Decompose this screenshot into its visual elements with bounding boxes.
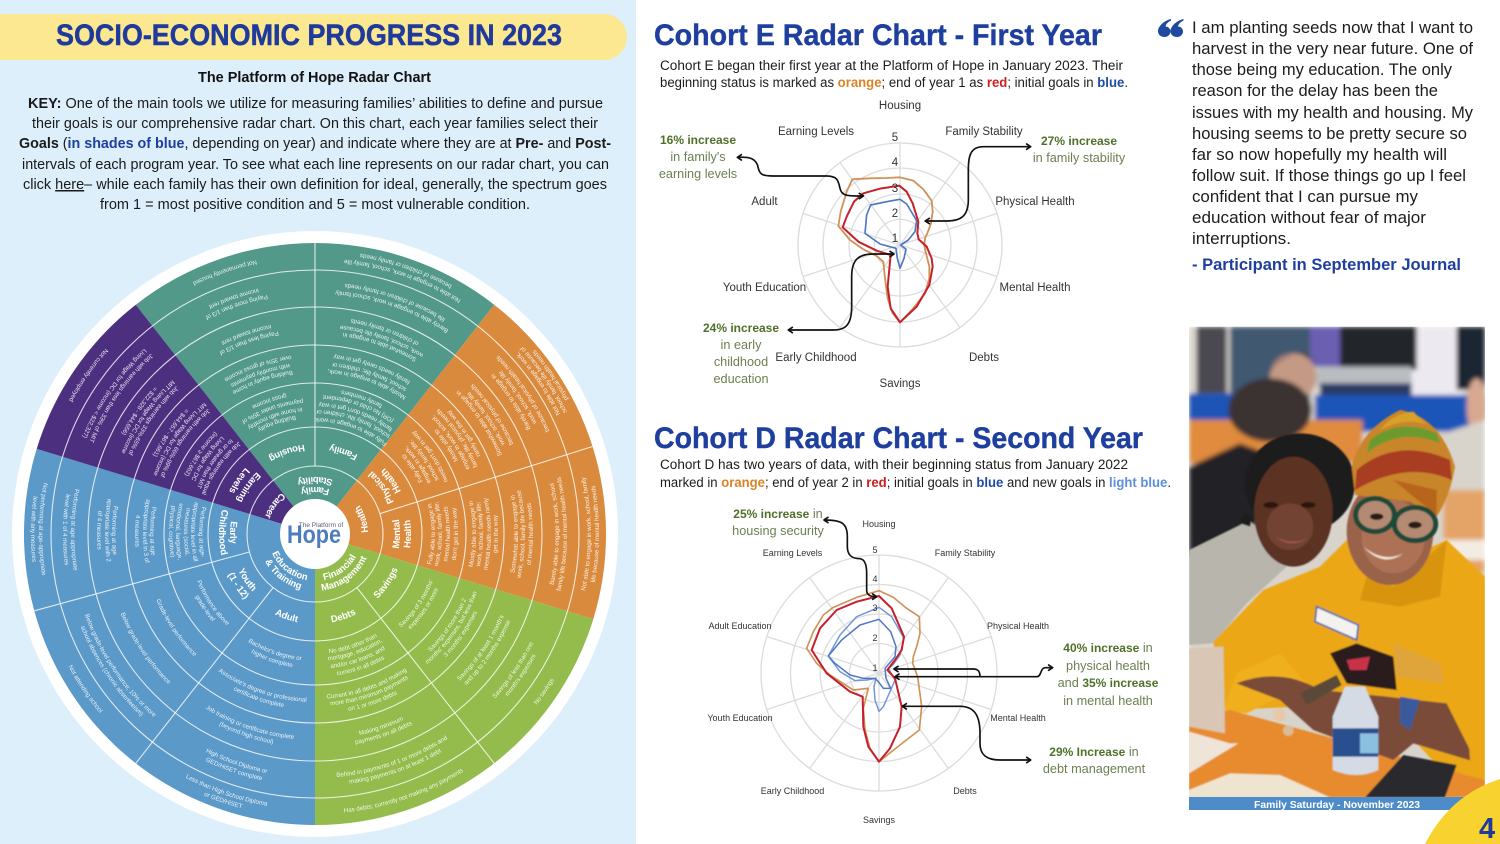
level text: youth: school absences (chronic absenteeism)	[74, 624, 145, 721]
level text: early childhood: appropriate level with 2	[102, 498, 113, 563]
level text: mental health: of mental health needs	[526, 502, 535, 566]
level text: housing: gross income	[252, 392, 286, 408]
domain labels: Financial	[322, 554, 356, 580]
axis labels	[723, 100, 1075, 390]
level text: savings: 3 months' expenses	[442, 609, 481, 660]
callout: 27% increase: 27% increase	[1041, 134, 1117, 148]
text block: key explanation: Goals (in shades of blue, depending on year) and indicate where they are at Pre- and Post-	[19, 135, 611, 152]
text block: Cohort D description: Cohort D has two years of data, with their beginning status from January 2022	[660, 457, 1128, 472]
level text: debts: No debt other than	[327, 632, 380, 658]
text block: participant quote: far so now hopefully my health will	[1192, 145, 1447, 164]
domain labels: Housing	[268, 444, 305, 461]
heading: Cohort E: Cohort E Radar Chart - First Year	[654, 19, 1102, 52]
level text: mental health: Mostly able to engage in	[467, 500, 478, 568]
callout: 25% increase: housing security	[732, 524, 824, 538]
wedge: financial management	[315, 534, 593, 825]
level text: early childhood	[30, 483, 206, 576]
axis labels: Debts	[969, 352, 999, 364]
axis labels: Youth Education	[723, 282, 806, 294]
text block: key explanation	[19, 95, 611, 213]
domain labels: Health	[404, 520, 412, 548]
text block: participant quote: confident that I can pursue my	[1192, 187, 1418, 206]
text block: key explanation: from 1 = most positive condition and 5 = most vulnerable condition.	[100, 196, 530, 213]
level text: savings: month's expenses	[503, 653, 539, 699]
level text: early childhood: Performing at age-	[197, 506, 207, 558]
wedge: family stability	[136, 243, 494, 534]
level text: mental health: work, school, family life;	[433, 501, 444, 568]
level text: debts: Making minimum	[358, 715, 405, 738]
axis labels: Earning Levels	[763, 548, 823, 558]
level text: adult: Job training or certificate complete	[203, 704, 296, 746]
domain labels: Family	[302, 486, 330, 496]
level text: youth: grade-level	[193, 593, 217, 623]
level text: physical health	[402, 346, 570, 483]
level text: physical health: engage in work,	[402, 443, 434, 485]
domain labels: Childhood	[219, 510, 228, 555]
logo: The Platform of Hope: Hope	[287, 521, 341, 549]
level text: mental health: family life because of mental health needs	[556, 476, 569, 592]
axis labels: Housing	[879, 100, 921, 112]
level text: adult: or GED/HiSET	[203, 791, 244, 811]
callout: 40% and 35% increase: in mental health	[1063, 694, 1153, 708]
chart: Cohort D radar	[707, 517, 1053, 825]
level text: earning levels: Job with earnings less than 33% of MIT	[82, 349, 155, 445]
level text: family	[314, 254, 460, 446]
axis labels: Adult Education	[708, 621, 772, 631]
level text: earning levels: = $44,657 - $67,661)	[149, 406, 190, 459]
chart: Cohort E radar	[723, 100, 1075, 390]
logo: The Platform of Hope: The Platform of	[299, 522, 343, 529]
level text: mental health: work, school, family life because	[515, 489, 527, 580]
domain labels: Management	[321, 556, 367, 591]
level text: family: family needs don't get in way	[318, 402, 392, 432]
level text: housing: Not permanently housed	[193, 260, 257, 286]
level text: physical health: school, family life;	[407, 437, 442, 483]
callout: 40% and 35% increase: and 35% increase	[1058, 676, 1158, 690]
level text: family: family needs rarely get in way	[331, 348, 413, 386]
text block: Cohort E description	[660, 58, 1128, 90]
text block: key explanation: KEY: One of the main tools we utilize for measuring families’ abilities to define and pursue	[28, 95, 603, 112]
level text: physical health: rarely get in the way	[445, 407, 484, 459]
level text: earning levels: Living Wage for DC (income < $22,327)	[76, 344, 149, 440]
level text: earning levels: Job with earnings 66%-99% of	[154, 404, 212, 480]
text block: participant quote: follow suit. If those things go up I feel	[1192, 166, 1466, 185]
level text: family: life because of children or family needs	[343, 276, 448, 323]
level text: mental health: Barely able to engage in work, school	[549, 482, 561, 586]
axis labels: Family Stability	[945, 126, 1023, 138]
level text: debts: mortgage, education,	[326, 637, 385, 666]
callout: 40% and 35% increase: physical health	[1066, 659, 1150, 673]
callout: 16% increase: in family's	[670, 150, 726, 164]
level text: housing: Building equity in home	[232, 370, 293, 394]
level text: housing: income toward rent	[208, 288, 259, 309]
text block: key explanation: intervals of each program year. To see what each line represents on our radar chart, you can	[22, 156, 609, 173]
domain labels: Health	[382, 468, 401, 494]
level text: physical health: Not able to engage in work,	[514, 349, 564, 417]
axis labels: Physical Health	[995, 196, 1075, 208]
quote attribution: - Participant in September Journal	[1192, 256, 1461, 274]
domain labels: Debts	[330, 610, 356, 622]
level text: youth: Performance above	[193, 578, 232, 629]
scale numbers: 1	[872, 663, 878, 673]
callout: 16% increase: earning levels	[659, 167, 737, 181]
level text: physical health: physical health needs	[531, 348, 571, 402]
data lines	[807, 591, 922, 762]
level text: family: Mostly able to engage in work,	[325, 362, 409, 401]
level text: early childhood: of 4 measures	[95, 510, 103, 550]
callout: 24% increase: 24% increase	[703, 321, 779, 335]
level text: early childhood: level with any measures	[28, 496, 39, 562]
level text: family: school, family life; children or	[316, 410, 390, 438]
domain labels: Physical	[368, 471, 394, 504]
text block: Cohort D description	[660, 457, 1171, 490]
text block: participant quote: I am planting seeds now that I want to	[1192, 18, 1473, 37]
heading: Cohort D: Cohort D Radar Chart - Second Year	[654, 422, 1143, 455]
level text: mental health: Not able to engage in work, school, family	[580, 476, 593, 591]
level text: physical health: needs don't get in way	[409, 427, 453, 484]
level text: adult: High School Diploma or	[204, 747, 269, 777]
level text: housing	[193, 260, 303, 432]
callout: 16% increase: 16% increase	[660, 133, 736, 147]
level text: early childhood: measures (social,	[182, 507, 192, 557]
domain labels: Education	[272, 550, 308, 580]
level text: housing: Paying more than 1/3 of	[206, 294, 268, 320]
level text: family: Fully able to engage in work,	[314, 417, 387, 446]
level text: debts: Has debts; currently not making any payments	[342, 767, 467, 821]
level text: earning levels: Job with earnings equal	[196, 437, 243, 497]
subtitle: The Platform of Hope Radar Chart: The Platform of Hope Radar Chart	[198, 69, 431, 86]
callout: 29% increase: debt management	[1043, 762, 1146, 776]
domain labels: & Training	[266, 560, 302, 590]
level text: adult	[186, 638, 306, 808]
axis labels: Physical Health	[987, 621, 1049, 631]
level text: physical health: engage in work, school,	[429, 412, 474, 472]
text block: participant quote: issues with my health and housing. My	[1192, 103, 1473, 122]
callout: 40% and 35% increase: 40% increase in	[1063, 641, 1153, 655]
domain labels: Family	[329, 444, 358, 460]
axis labels: Youth Education	[707, 713, 773, 723]
level text: physical health: Barely able to engage in	[489, 370, 534, 432]
title banner	[0, 14, 627, 60]
domain labels: (1 - 12)	[226, 572, 249, 600]
level text: mental health: mental health needs	[442, 506, 452, 562]
axis labels: Debts	[953, 786, 977, 796]
level text: mental health: life because of mental health needs	[590, 485, 601, 583]
level text: debts: and/or car loans, and	[329, 644, 388, 673]
callout: 25% increase: 25% increase in	[733, 507, 823, 521]
photo caption bar: Family Saturday - November 2023	[1254, 799, 1420, 811]
axis labels: Early Childhood	[761, 786, 824, 796]
level text: mental health: work, school, family life;	[475, 501, 485, 568]
level text: earning levels: (income ≥ $67,662)	[181, 429, 219, 478]
level text: family: Somewhat able to engage in	[340, 327, 419, 363]
callout: 24% increase: education	[713, 372, 769, 386]
data lines	[838, 177, 933, 322]
photo caption bar	[1189, 797, 1485, 811]
callout: 24% increase: childhood	[714, 355, 768, 369]
level text: youth	[68, 580, 229, 716]
level text: debts: Current in all debts and making	[325, 666, 410, 706]
level text: adult: GED/HiSET complete	[204, 756, 264, 784]
level text: family: because of children or family needs	[358, 248, 454, 290]
level text: family: family members	[341, 390, 382, 408]
wedge: health	[315, 305, 606, 619]
scale numbers: 3	[892, 183, 898, 195]
level text: debts: more than minimum payments	[328, 674, 411, 712]
level text: mental health: don't get in the way	[450, 506, 460, 561]
level text: housing: payments under 35% of	[242, 398, 303, 424]
wedge: education and training	[24, 449, 315, 825]
axis labels: Mental Health	[990, 713, 1046, 723]
level text: family: Barely able to engage in work, school family	[332, 282, 452, 335]
scale numbers: 3	[872, 603, 878, 613]
text block: participant quote: harvest in the very near future. One of	[1192, 39, 1473, 58]
axis labels	[707, 519, 1049, 825]
level text: savings: months' expenses, but less than	[423, 589, 484, 669]
level text: earning levels: MIT Living Wage for DC (income	[115, 376, 177, 456]
axis labels: Savings	[863, 815, 896, 825]
axis labels: Family Stability	[935, 548, 996, 558]
domain labels: Career	[266, 494, 285, 519]
text block: participant quote: those being my education. The only	[1192, 60, 1452, 79]
text block: Cohort D description: marked in orange; end of year 2 in red; initial goals in blue and new goals in light blue.	[660, 475, 1171, 490]
level text: early childhood: 4 measures	[133, 515, 141, 547]
domain labels: Mental	[392, 520, 400, 548]
level text: savings: Savings of 3 months'	[397, 578, 438, 631]
axis labels: Mental Health	[1000, 282, 1070, 294]
domain labels: Savings	[374, 568, 398, 598]
scale numbers: 5	[892, 132, 898, 144]
text block: participant quote: interruptions.	[1192, 229, 1291, 248]
level text: youth: Below grade-level performance; 10% or more	[76, 612, 159, 724]
level text: family: Not able to engage in work, school, family life	[342, 251, 464, 305]
level text: family: school, family life; children or	[330, 356, 409, 393]
panel: left pale blue background	[0, 0, 636, 844]
level text: savings	[398, 579, 554, 704]
level text: early childhood: Performing at age appropriate	[68, 488, 80, 572]
level text: adult: Less than High School Diploma	[184, 773, 269, 811]
level text: early childhood: appropriate level in all	[188, 501, 200, 562]
level text: early childhood: physical, cognitive)	[167, 505, 177, 558]
text block: key explanation: their goals is our comprehensive radar chart. On this chart, each year families select their	[32, 115, 598, 132]
text block: participant quote: reason for the delay has been the	[1192, 81, 1438, 100]
level text: savings: Savings of less than one	[491, 640, 537, 701]
domain labels: Early	[228, 522, 238, 544]
level text: earning levels: = $22,328 - $44,656)	[118, 384, 159, 437]
domain labels: Stability	[298, 476, 332, 486]
level text: housing: over 35% of gross income	[224, 356, 292, 381]
level text: physical health: Fully able to	[400, 451, 426, 484]
icon: quotation mark	[1158, 19, 1184, 37]
level text: earning levels: MIT Living Wage for DC (income	[146, 398, 209, 479]
level text: mental health: Fully able to engage in	[426, 502, 437, 565]
level text: physical health: family life; physical needs	[434, 405, 482, 470]
callout: 29% increase: 29% Increase in	[1049, 745, 1139, 759]
text block: key explanation: click here– while each family has their own definition for ideal, generally, the spectrum goes	[23, 176, 607, 193]
scale numbers: 4	[872, 574, 878, 584]
level text: housing: in home with monthly	[248, 408, 302, 430]
domain labels: Youth	[239, 568, 256, 592]
scale numbers	[892, 132, 899, 245]
level text: adult: Associate's degree or professional	[215, 667, 309, 710]
level text: savings: and up to 2 months expense	[462, 617, 516, 689]
title banner: SOCIO-ECONOMIC PROGRESS IN 2023	[56, 19, 562, 52]
level text: mental health: Somewhat able to engage in	[509, 494, 520, 573]
level text: earning levels: Job with earnings 33%-65% of	[123, 382, 180, 457]
domain labels: Levels	[230, 468, 250, 493]
domain labels: Health	[356, 506, 368, 532]
scale numbers: 4	[892, 157, 899, 169]
level text: adult: (beyond high school)	[217, 720, 275, 748]
logo: The Platform of Hope	[280, 499, 350, 569]
scale numbers: 5	[872, 545, 878, 555]
domain labels	[219, 444, 412, 622]
level text: savings: Savings of at least 1 month's	[455, 613, 509, 685]
level text: mental health	[427, 477, 600, 591]
level text: early childhood: Performing at age	[110, 506, 119, 556]
level text: physical health: Mostly able to	[432, 426, 461, 463]
level text: physical health: because of physical health needs	[494, 352, 555, 434]
level text: mental health: get in the way	[492, 514, 500, 553]
scale numbers: 1	[892, 233, 898, 245]
level text: adult: Bachelor's degree or	[246, 637, 303, 665]
level text: debts: current in all debts	[335, 654, 386, 679]
axis labels: Savings	[880, 378, 921, 390]
level text: earning levels	[69, 348, 240, 496]
level text: physical health: work, school, family life	[496, 367, 541, 427]
level text: youth: Below grade-level performance	[115, 611, 173, 689]
text block: participant quote	[1192, 18, 1473, 248]
scale numbers: 2	[872, 633, 878, 643]
axis labels: Earning Levels	[778, 126, 854, 138]
axis labels: Adult	[751, 196, 778, 208]
text block: Cohort E description: Cohort E began their first year at the Platform of Hope in January 2023. Their	[660, 58, 1124, 73]
domain labels: Adult	[274, 610, 298, 622]
level text: early childhood: Not performing at age-appropriate	[36, 482, 49, 577]
level text: physical health: because of physical needs	[469, 381, 518, 447]
arrows	[737, 144, 1031, 333]
level text: family: work, school, family life because	[338, 319, 427, 360]
level text: early childhood: emotional, language,	[174, 503, 184, 561]
level text: debts	[326, 634, 463, 812]
level text: debts: on 1 or more debts	[347, 689, 399, 715]
domain labels: Earning	[236, 472, 261, 502]
page corner with page number	[1425, 779, 1500, 844]
level text: mental health: mental health needs rarely	[482, 496, 493, 571]
axis labels: Early Childhood	[775, 352, 857, 364]
level text: adult: certificate complete	[232, 685, 286, 711]
scale numbers	[872, 545, 878, 673]
level text: early childhood: level with 1 of 4 measures	[60, 494, 71, 566]
level text: physical health: school, family life because of	[518, 343, 571, 415]
axis labels: Housing	[862, 519, 896, 529]
chart: radar key wheel	[12, 231, 618, 837]
level text: housing: Building equity	[258, 416, 296, 432]
level text: earning levels: Living Wage for DC	[187, 433, 226, 483]
level text: family: (OR) No child or dependent	[323, 395, 394, 422]
level text: youth: Grade-level performance	[151, 597, 199, 660]
level text: debts: Behind in payments of 1 or more debts and	[334, 734, 452, 786]
level text: housing: income toward rent	[221, 324, 272, 345]
text block: participant quote: housing seems to be pretty secure so	[1192, 124, 1467, 143]
level text: housing: Paying less than 1/3 of	[220, 331, 278, 356]
level text: earning levels: Not currently employed	[65, 346, 110, 404]
level text: physical health: Somewhat able to engage in	[454, 386, 507, 458]
text block: participant quote: education without fear of major	[1192, 208, 1426, 227]
level text: early childhood: appropriate level in 3 of	[140, 499, 152, 564]
callout: 27% increase: in family stability	[1033, 151, 1126, 165]
wedge: career	[37, 305, 315, 534]
level text: debts: payments on all debts	[354, 720, 414, 748]
level text: early childhood: Performing at age	[148, 506, 157, 557]
text block: Cohort E description: beginning status is marked as orange; end of year 1 as red; initial goals in blue.	[660, 75, 1128, 90]
level text: housing: with monthly payments	[230, 364, 290, 387]
level text: adult: higher complete	[249, 648, 295, 671]
level text: savings: expenses or more	[406, 585, 442, 632]
arrows	[824, 517, 1053, 763]
level text: savings: Savings of more than 2	[426, 596, 471, 655]
level text: debts: making payments on at least 1 debt	[347, 747, 444, 790]
level text: physical health: work, school, family life	[465, 388, 509, 448]
photo: two women smiling at Family Saturday	[1189, 327, 1487, 797]
level text: youth: Not attending school	[65, 663, 104, 715]
level text: family: of children or family needs	[349, 314, 421, 347]
scale numbers: 2	[892, 208, 898, 220]
level text: savings: No savings	[533, 677, 556, 706]
level text: earning levels: to or greater than MIT	[192, 435, 235, 491]
callout: 24% increase: in early	[721, 338, 762, 352]
